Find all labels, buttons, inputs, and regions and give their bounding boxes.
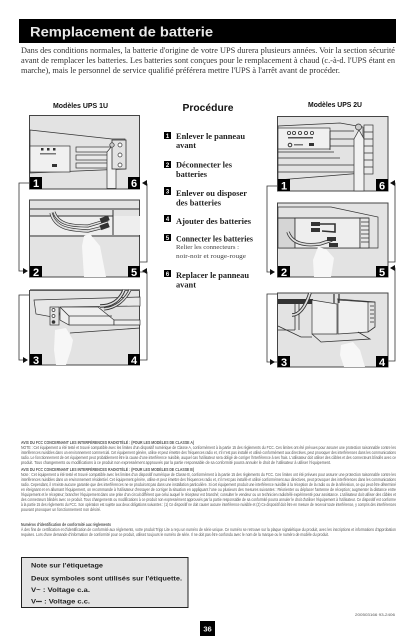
label badge: 3: 3 — [281, 357, 287, 369]
FCC notice: class A: AVIS DU FCC CONCERNANT LES INTERFÉRENCES RADIOTÉLÉ : (POUR LES MODÈLES DE CLASSE A) — [21, 440, 194, 445]
page number: 36 — [203, 624, 212, 634]
title banner: Remplacement de batterie — [30, 24, 213, 40]
arrow: 1U step 4 to 5 — [140, 268, 147, 360]
step 1: avant — [176, 141, 196, 150]
FCC notice: class A: produit. Tous changements ou modifications à ce produit non expressément approuvés par la partie responsable de sa conformité pourra annuler le droit de l'utilisateur à utiliser l'équipement. — [21, 460, 331, 465]
DC voltage: V⎓ : Voltage c.c. — [31, 598, 90, 606]
step 5: Connecter les batteries — [176, 234, 254, 244]
step 1 — [164, 132, 245, 150]
step 4: Ajouter des batteries — [176, 217, 252, 226]
step 5: 5 — [166, 236, 170, 242]
arrow: 2U step 4 to 5 — [388, 265, 395, 361]
labeling note box — [22, 558, 188, 608]
intro text — [21, 46, 395, 75]
note title: Note sur l'étiquetage — [31, 562, 103, 570]
document number: 200503166 93-2406 — [355, 612, 396, 617]
arrow: 1U step 2 to 3 — [19, 295, 29, 363]
step 6: 6 — [166, 272, 170, 278]
panel: 1U remove batteries — [30, 290, 140, 367]
arrow: 1U step 5 to 6 — [140, 180, 147, 262]
label badge: 6: 6 — [131, 178, 137, 190]
panel: 1U front panel removal — [30, 116, 140, 190]
step 2: Déconnecter les — [176, 160, 233, 170]
arrow: 2U step 2 to 3 — [267, 294, 277, 365]
FCC notice: class B: pouvant provoquer un fonctionnement non désiré. — [21, 507, 101, 512]
step 3: 3 — [166, 190, 170, 196]
note sentence: Deux symboles sont utilisés sur l'étiquette. — [31, 576, 182, 582]
compliance identification notice: requises. Lors d'une demande d'information de conformité pour ce produit, utilisez toujours le numéro de série. Il ne doit pas être confondu avec le nom de la marque ou le numéro de modèle du produit. — [21, 532, 329, 537]
procedure list — [164, 132, 254, 290]
panel: 2U disconnect batteries — [278, 203, 388, 279]
title banner — [19, 19, 396, 43]
label badge: 4: 4 — [379, 357, 386, 369]
step 3: Enlever ou disposer — [176, 189, 247, 198]
step 2 — [164, 160, 233, 179]
label badge: 2: 2 — [281, 267, 287, 279]
step 3: des batteries — [176, 198, 222, 208]
label badge: 1: 1 — [281, 180, 287, 192]
step 6: Replacer le panneau — [176, 271, 249, 280]
label badge: 6: 6 — [379, 180, 385, 192]
AC voltage: V~ : Voltage c.a. — [31, 587, 90, 594]
step 5 — [164, 234, 254, 260]
FCC notice: class B — [21, 467, 397, 512]
step 3 — [164, 187, 247, 208]
step 6: avant — [176, 280, 196, 290]
heading: Modèles UPS 2U: Modèles UPS 2U — [308, 102, 362, 109]
step 2: batteries — [176, 170, 208, 179]
step 1: Enlever le panneau — [176, 132, 245, 141]
step 1: 1 — [166, 134, 170, 140]
label badge: 1: 1 — [33, 178, 39, 190]
arrow: 2U step 5 to 6 — [388, 180, 395, 262]
arrow: 2U step 1 to 2 — [267, 186, 277, 275]
label badge: 4: 4 — [131, 355, 138, 367]
step 5: noir-noir et rouge-rouge — [176, 253, 246, 260]
label badge: 5: 5 — [131, 267, 137, 279]
panel: 1U disconnect batteries — [30, 200, 140, 279]
label badge: 5: 5 — [379, 267, 385, 279]
step 5: Relier les connecteurs : — [176, 244, 239, 251]
compliance identification notice — [21, 522, 396, 537]
FCC notice: class B: AVIS DU FCC CONCERNANT LES INTERFÉRENCES RADIOTÉLÉ : (POUR LES MODÈLES DE CLASSE B) — [21, 467, 194, 472]
panel: 2U front panel removal — [278, 116, 388, 192]
heading: Procédure: Procédure — [182, 103, 234, 114]
panel: 2U remove batteries — [278, 293, 388, 369]
heading: Modèles UPS 1U: Modèles UPS 1U — [53, 103, 108, 110]
FCC notice: class A — [21, 440, 397, 465]
arrow: 1U step 1 to 2 — [19, 183, 29, 274]
step 4: 4 — [166, 217, 170, 223]
step 6 — [164, 270, 249, 290]
intro text: Dans des conditions normales, la batterie d'origine de votre UPS durera plusieurs années. Voir la section sécurité — [21, 46, 395, 55]
compliance identification notice: Numéros d'identification de conformité aux règlements — [21, 522, 111, 527]
label badge: 2: 2 — [33, 267, 39, 279]
label badge: 3: 3 — [33, 355, 39, 367]
page number — [200, 621, 215, 636]
intro text: marche), mais le personnel de service qualifié préférera mettre l'UPS à l'arrêt avant de procéder. — [21, 66, 340, 75]
step 4 — [164, 215, 252, 226]
step 2: 2 — [166, 163, 170, 169]
intro text: avant de remplacer les batteries. Les batteries sont conçues pour le remplacement à chaud (c.-à-d. l'UPS étant en — [21, 56, 395, 65]
